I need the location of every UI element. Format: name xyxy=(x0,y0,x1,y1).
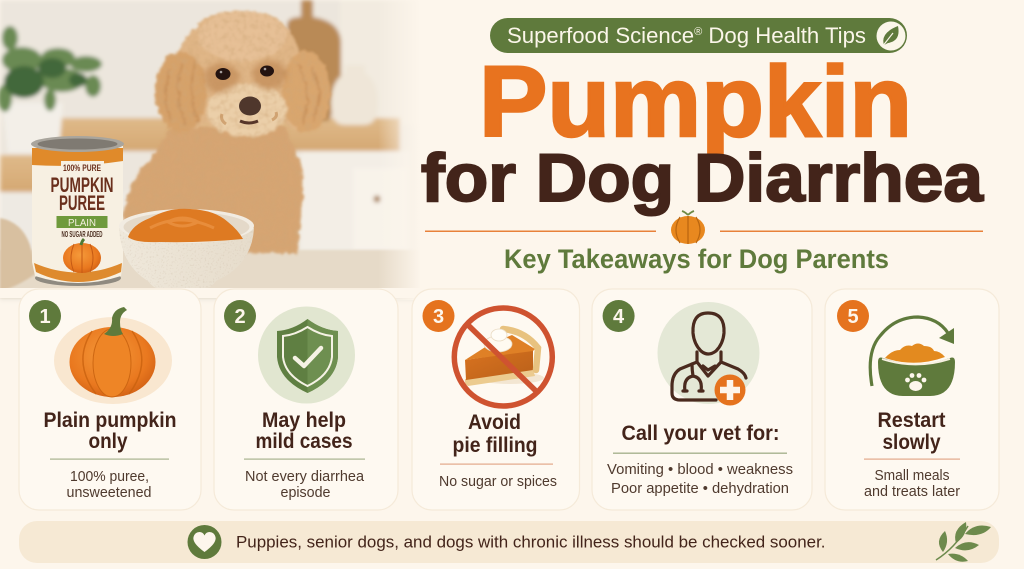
body text: unsweetened xyxy=(66,484,152,501)
heading: Call your vet for: xyxy=(622,421,780,445)
body text xyxy=(245,468,365,501)
heading xyxy=(256,408,353,453)
dog face xyxy=(204,60,287,124)
heading xyxy=(44,408,176,453)
pill text: ® xyxy=(694,26,702,38)
pill text: Superfood Science xyxy=(507,23,693,48)
can pumpkin xyxy=(63,239,101,273)
body text: No sugar or spices xyxy=(439,473,557,490)
body text: Small meals xyxy=(874,467,950,484)
body text: Vomiting • blood • weakness xyxy=(607,461,793,478)
heading: Plain pumpkin xyxy=(44,408,176,432)
body text: Poor appetite • dehydration xyxy=(611,480,789,497)
icon: pumpkin xyxy=(54,307,172,404)
heading: May help xyxy=(262,408,346,432)
pumpkin puree can xyxy=(31,136,124,286)
badge 4: 4 xyxy=(613,306,625,328)
countertop xyxy=(0,250,420,298)
heading: Restart xyxy=(878,408,946,432)
can label text xyxy=(50,161,114,239)
can label text: 100% PURE xyxy=(63,163,101,173)
icon: food bowl with arrow xyxy=(870,317,955,396)
divider with pumpkin xyxy=(425,211,983,244)
body text: Not every diarrhea xyxy=(245,468,365,485)
dog body xyxy=(123,126,302,253)
can label text: PUMPKIN xyxy=(50,174,114,197)
body text: episode xyxy=(280,484,330,501)
towel xyxy=(0,218,37,291)
icon: heart xyxy=(188,525,222,559)
photo fades xyxy=(378,0,422,300)
footer banner xyxy=(19,521,999,563)
dog xyxy=(123,10,330,253)
title: Pumpkin: Pumpkin xyxy=(479,46,912,158)
badge 1 xyxy=(29,300,61,332)
icon: leaf badge xyxy=(876,22,906,50)
heading: Avoid xyxy=(468,410,521,434)
body text xyxy=(66,468,152,501)
body text: and treats later xyxy=(864,483,960,500)
panel: card 4 call your vet xyxy=(592,289,812,510)
header pill xyxy=(490,18,907,53)
badge 2 xyxy=(224,300,256,332)
bowl of puree xyxy=(119,209,254,293)
body text xyxy=(864,467,960,500)
badge 2: 2 xyxy=(234,306,246,328)
icon: small pumpkin xyxy=(671,211,705,244)
heading: slowly xyxy=(882,430,941,454)
body text xyxy=(607,461,793,497)
badge 4 xyxy=(603,300,635,332)
subtitle: Key Takeaways for Dog Parents xyxy=(504,244,889,274)
kitchen backdrop xyxy=(0,0,420,300)
badge 5 xyxy=(837,300,869,332)
footer text: Puppies, senior dogs, and dogs with chronic illness should be checked sooner. xyxy=(236,534,826,552)
photo: dog with canned pumpkin and bowl xyxy=(0,0,430,300)
panel: card 1 plain pumpkin xyxy=(19,289,201,510)
badge 3: 3 xyxy=(433,306,444,328)
heading xyxy=(878,408,946,454)
pill text: Dog Health Tips xyxy=(702,23,866,48)
title: for Dog Diarrhea: for Dog Diarrhea xyxy=(421,140,984,216)
body text: 100% puree, xyxy=(70,468,149,485)
heading: mild cases xyxy=(256,429,353,453)
panel: card 3 avoid pie filling xyxy=(412,289,580,510)
dog ears and head xyxy=(155,10,330,137)
heading: pie filling xyxy=(452,433,538,457)
icon: leaves xyxy=(936,522,991,562)
icon: vet xyxy=(658,302,760,406)
badge 5: 5 xyxy=(847,306,859,328)
badge 1: 1 xyxy=(39,306,51,328)
heading: only xyxy=(88,429,128,453)
badge 3 xyxy=(422,300,454,332)
can label text: PUREE xyxy=(59,192,105,215)
panel: card 5 restart slowly xyxy=(825,289,999,510)
heading xyxy=(452,410,538,457)
can label text: PLAIN xyxy=(68,218,96,229)
can label text: NO SUGAR ADDED xyxy=(62,230,103,239)
icon: shield xyxy=(258,306,355,404)
icon: pie with prohibition sign xyxy=(454,308,552,406)
panel: card 2 may help xyxy=(214,289,398,510)
